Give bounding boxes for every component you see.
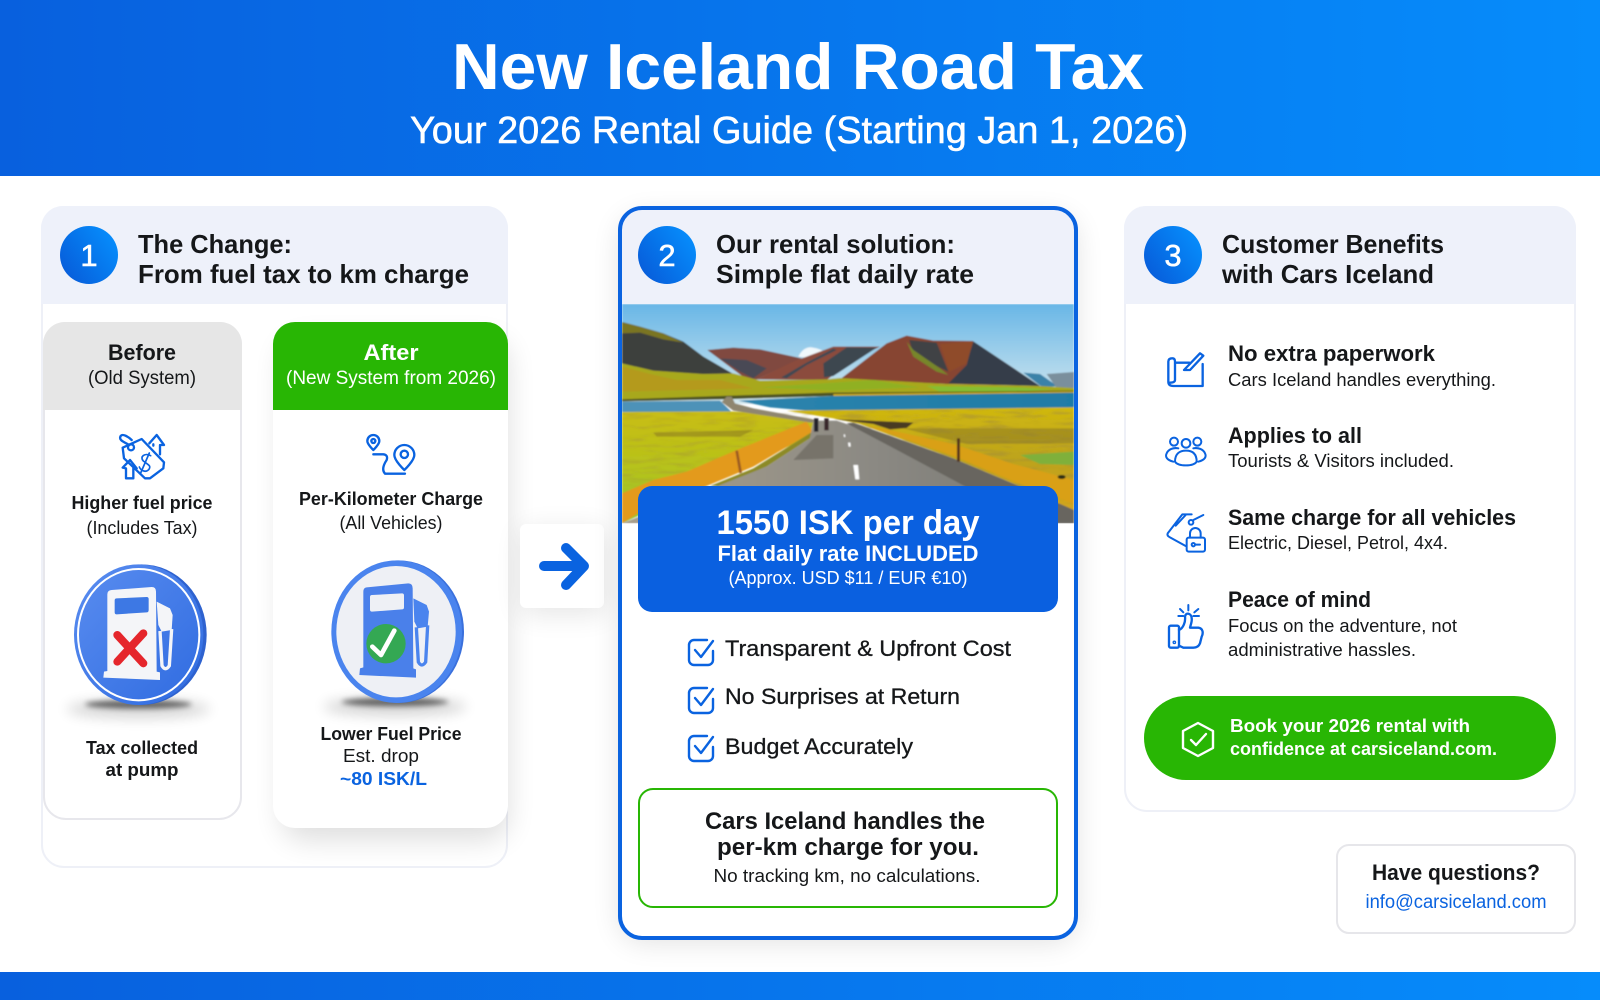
- card: after: After: [364, 340, 419, 365]
- price box: Flat daily rate INCLUDED: [718, 541, 978, 566]
- benefit: same charge: Electric, Diesel, Petrol, 4x4.: [1228, 533, 1448, 553]
- panel heading: customer benefits: [1124, 206, 1576, 304]
- contact box: Have questions?: [1372, 860, 1540, 885]
- card: after: Est. drop: [343, 746, 419, 766]
- panel heading: rental solution: Our rental solution:: [716, 229, 955, 259]
- benefit: paperwork: No extra paperwork: [1228, 341, 1436, 366]
- panel heading: the change: The Change:: [138, 229, 292, 259]
- card: before: at pump: [106, 760, 179, 780]
- icon: price tag with arrows: [120, 435, 164, 478]
- benefit: peace of mind: Focus on the adventure, not: [1228, 616, 1457, 636]
- header banner: [0, 0, 1600, 176]
- panel: the change: [41, 206, 508, 867]
- panel heading: the change: 1: [80, 238, 98, 273]
- footer band: [0, 972, 1600, 1000]
- benefit: peace of mind: administrative hassles.: [1228, 640, 1416, 660]
- benefit: same charge: Same charge for all vehicles: [1228, 505, 1516, 530]
- panel heading: customer benefits: 3: [1164, 238, 1182, 273]
- callout: handles the charge: Cars Iceland handles the: [705, 808, 985, 835]
- panel heading: the change: [41, 206, 508, 304]
- card: before: (Old System): [88, 368, 196, 389]
- callout: handles the charge: per-km charge for you.: [717, 834, 979, 861]
- check item 2: No Surprises at Return: [725, 684, 960, 709]
- card: before: Before: [108, 340, 176, 365]
- panel heading: rental solution: 2: [658, 238, 676, 273]
- card: before: (Includes Tax): [86, 518, 198, 538]
- price box: (Approx. USD $11 / EUR €10): [728, 568, 968, 588]
- arrow box: [520, 524, 606, 614]
- benefit: peace of mind: Peace of mind: [1228, 587, 1371, 612]
- panel: rental solution: [620, 208, 1076, 942]
- photo: iceland road landscape: [622, 304, 1074, 523]
- panel: customer benefits: [1124, 206, 1576, 811]
- benefit: paperwork: Cars Iceland handles everything.: [1228, 370, 1496, 390]
- card: after: (All Vehicles): [340, 513, 442, 533]
- card: before: Higher fuel price: [72, 493, 212, 513]
- check item 1: Transparent & Upfront Cost: [725, 636, 1011, 661]
- contact box: [1337, 845, 1575, 933]
- checklist: [689, 636, 1011, 761]
- card: after: Per-Kilometer Charge: [299, 489, 483, 509]
- benefit: applies to all: [1166, 423, 1454, 471]
- card: after: Lower Fuel Price: [320, 724, 462, 744]
- panel heading: customer benefits: Customer Benefits: [1222, 229, 1444, 259]
- call to action pill: Book your 2026 rental with: [1230, 716, 1470, 736]
- panel heading: rental solution: Simple flat daily rate: [716, 259, 974, 289]
- callout: handles the charge: [639, 789, 1057, 907]
- title: New Iceland Road Tax: [452, 30, 1144, 103]
- benefit: applies to all: Applies to all: [1228, 423, 1362, 448]
- benefit: same charge: [1167, 505, 1516, 553]
- card: before: Tax collected: [86, 738, 198, 758]
- price box: [638, 486, 1058, 612]
- panel heading: rental solution: [620, 208, 1076, 304]
- icon: signed paper: [1168, 353, 1203, 386]
- call to action pill: [1144, 696, 1556, 780]
- callout: handles the charge: No tracking km, no calculations.: [714, 866, 980, 886]
- price box: 1550 ISK per day: [716, 504, 980, 542]
- panel heading: customer benefits: with Cars Iceland: [1221, 259, 1434, 289]
- contact box: info@carsiceland.com: [1366, 892, 1546, 913]
- call to action pill: confidence at carsiceland.com.: [1230, 739, 1497, 759]
- card: after: [273, 322, 508, 840]
- card: after: (New System from 2026): [286, 368, 496, 389]
- benefit: applies to all: Tourists & Visitors included.: [1228, 451, 1454, 471]
- panel heading: the change: From fuel tax to km charge: [138, 259, 469, 289]
- card: before: [43, 322, 242, 819]
- icon: fuel pump checked: [323, 560, 467, 716]
- benefit: peace of mind: [1169, 587, 1457, 660]
- icon: route with pins: [367, 435, 414, 474]
- benefit: paperwork: [1168, 341, 1496, 390]
- icon: tags with lock: [1167, 514, 1205, 552]
- icon: thumbs up: [1169, 605, 1203, 648]
- icon: group of people: [1166, 438, 1206, 465]
- icon: fuel pump crossed: [67, 564, 210, 718]
- check item 3: Budget Accurately: [725, 734, 913, 759]
- subtitle: Your 2026 Rental Guide (Starting Jan 1, 2026): [410, 110, 1188, 152]
- card: after: ~80 ISK/L: [340, 769, 427, 789]
